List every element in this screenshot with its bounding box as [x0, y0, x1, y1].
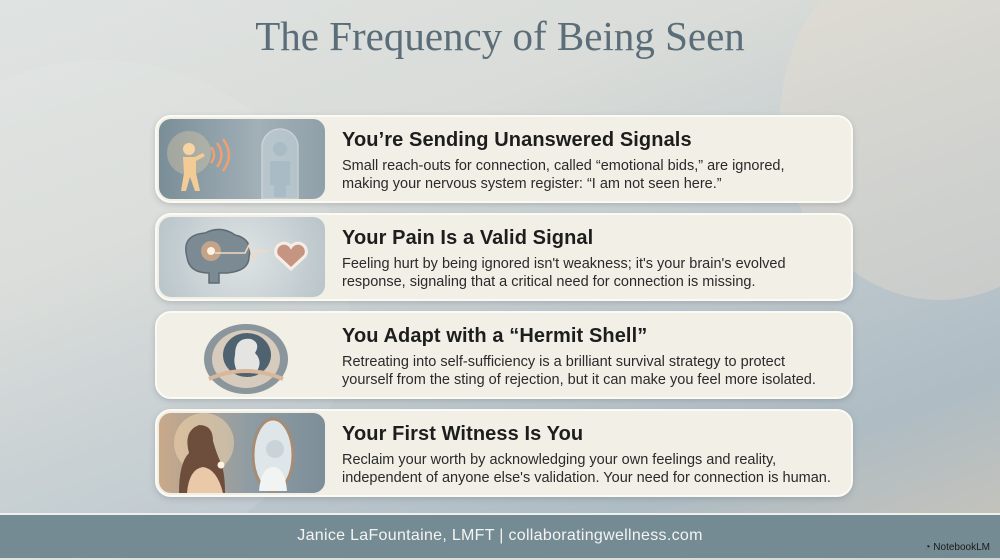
icon: mirror — [159, 413, 325, 493]
text block — [342, 158, 784, 192]
panel: unanswered signals — [155, 115, 853, 203]
text block: response, signaling that a critical need for connection is missing. — [342, 274, 755, 290]
text block: independent of anyone else's validation. Your need for connection is human. — [342, 470, 831, 486]
panel: pain is valid — [155, 213, 853, 301]
text block: Retreating into self-sufficiency is a brilliant survival strategy to protect — [342, 354, 785, 370]
icon: brain and heart — [159, 217, 325, 297]
heading: You Adapt with a “Hermit Shell” — [342, 325, 647, 347]
heading: Your Pain Is a Valid Signal — [342, 227, 593, 249]
text block: Feeling hurt by being ignored isn't weakness; it's your brain's evolved — [342, 256, 786, 272]
heading: Your First Witness Is You — [342, 423, 583, 445]
icon: signals figure — [159, 119, 325, 199]
text block — [342, 452, 831, 486]
text block — [342, 256, 786, 290]
text block: making your nervous system register: “I am not seen here.” — [342, 176, 722, 192]
footer — [0, 513, 1000, 558]
text block: Reclaim your worth by acknowledging your own feelings and reality, — [342, 452, 776, 468]
footer credit: Janice LaFountaine, LMFT | collaboratingwellness.com — [297, 527, 703, 544]
text block: yourself from the sting of rejection, but it can make you feel more isolated. — [342, 372, 816, 388]
panel: hermit shell — [155, 311, 853, 399]
text block — [342, 354, 816, 388]
icon: shell — [159, 315, 325, 395]
logo: NotebookLM: ◔ NotebookLM — [924, 542, 990, 553]
title: The Frequency of Being Seen — [255, 13, 745, 59]
heading: You’re Sending Unanswered Signals — [342, 129, 692, 151]
panel: first witness — [155, 409, 853, 497]
text block: Small reach-outs for connection, called “emotional bids,” are ignored, — [342, 158, 784, 174]
